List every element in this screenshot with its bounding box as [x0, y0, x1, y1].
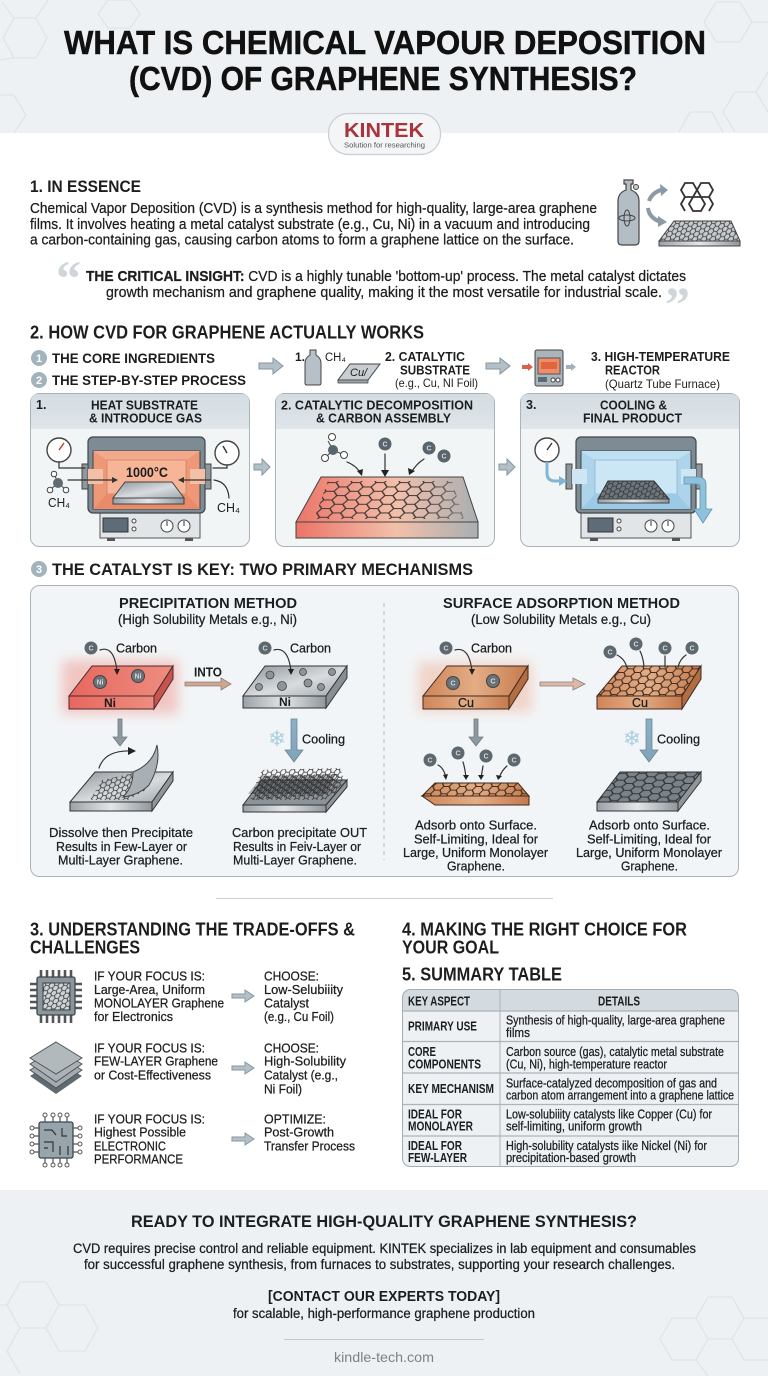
- title: (CVD) OF GRAPHENE SYNTHESIS?: [129, 60, 637, 97]
- badge row: core ingredients: 1: [36, 353, 42, 365]
- section 3 mechanism heading: THE CATALYST IS KEY: TWO PRIMARY MECHANISMS: [52, 561, 473, 579]
- Ni hot block: Ni: [104, 696, 116, 710]
- Cu block with graphene: C: [689, 646, 695, 652]
- Ni hot block: Ni: [96, 680, 104, 686]
- ingredient 2: copper plate: [338, 364, 380, 383]
- Ni block with carbon: Ni: [279, 695, 291, 709]
- Cu block with graphene: C: [633, 642, 639, 648]
- surface adsorption heading: [443, 596, 680, 627]
- section 3 trade-offs heading: CHALLENGES: [30, 938, 140, 958]
- precipitation heading: [118, 596, 297, 627]
- section 4 heading: [402, 920, 687, 958]
- section 2 heading: 2. HOW CVD FOR GRAPHENE ACTUALLY WORKS: [30, 322, 424, 342]
- INTO arrow: INTO: [194, 666, 222, 680]
- row: ideal for few-layer: [408, 1138, 708, 1165]
- call to action: for scalable, high-performance graphene production: [233, 1306, 535, 1321]
- step heading: 3.: [526, 398, 536, 412]
- graphene on gray block: [597, 772, 701, 811]
- header band: [0, 0, 768, 133]
- surface adsorption heading: (Low Solubility Metals e.g., Cu): [471, 612, 651, 627]
- carbon atom: [84, 642, 98, 654]
- atoms falling: C: [382, 442, 388, 448]
- section 1 heading: 1. IN ESSENCE: [30, 177, 141, 196]
- table header: [408, 994, 640, 1008]
- ingredient 1: CH4 cylinder: CH₄: [325, 352, 346, 364]
- adsorb caption left: [403, 818, 549, 874]
- icon: chip: [30, 970, 82, 1023]
- badge row: step-by-step: THE STEP-BY-STEP PROCESS: [52, 372, 246, 388]
- adsorb caption right: [576, 818, 723, 874]
- section 3 trade-offs heading: 3. UNDERSTANDING THE TRADE-OFFS &: [30, 920, 355, 940]
- cooling arrow: Cooling: [302, 732, 345, 746]
- ingredient 2 label: SUBSTRATE: [400, 364, 470, 378]
- row: core components: [408, 1044, 724, 1072]
- adsorb caption left: Self-Limiting, Ideal for: [414, 832, 539, 846]
- website: kindle-tech.com: [334, 1349, 434, 1365]
- section 4 heading: YOUR GOAL: [402, 938, 499, 958]
- peeled graphene block: [70, 745, 173, 811]
- focus text: PERFORMANCE: [94, 1152, 183, 1166]
- call to action: [233, 1289, 535, 1321]
- ingredient 2 label: (e.g., Cu, NI Foil): [395, 376, 478, 390]
- choice text: Ni Foil): [264, 1082, 302, 1096]
- surface adsorption heading: SURFACE ADSORPTION METHOD: [443, 596, 680, 612]
- choice text: CHOOSE:: [264, 968, 319, 984]
- step heading: & CARBON ASSEMBLY: [316, 412, 452, 426]
- arrow down left: [113, 719, 127, 746]
- choice text: CHOOSE:: [264, 1040, 319, 1056]
- furnace cool: [566, 437, 702, 541]
- footer paragraph: for successful graphene synthesis, from furnaces to substrates, supporting your research challenges.: [84, 1257, 675, 1272]
- essence paragraph: [30, 200, 597, 248]
- focus text: [94, 1112, 205, 1166]
- row: ideal for few-layer: High-solubility catalysts iike Nickel (Ni) for: [506, 1138, 708, 1153]
- row: ideal for monolayer: MONOLAYER: [408, 1120, 473, 1134]
- atoms falling: C: [426, 446, 432, 452]
- ingredient 3 label: (Quartz Tube Furnace): [605, 377, 720, 391]
- atoms on thin Cu block: C: [483, 754, 489, 760]
- arrow down: [469, 719, 483, 746]
- essence paragraph: Chemical Vapor Deposition (CVD) is a synthesis method for high-quality, large-area graphene: [30, 200, 597, 217]
- precipitate caption right: [232, 825, 367, 868]
- choice text: OPTIMIZE:: [264, 1112, 326, 1126]
- Ni hot block: Carbon: [116, 642, 157, 656]
- cooling arrow: Cooling: [657, 732, 700, 746]
- Ni hot block: Ni: [134, 674, 142, 680]
- ingredient 2 label: 2. CATALYTIC: [385, 350, 465, 364]
- step heading: [281, 398, 473, 426]
- row: core components: Carbon source (gas), catalytic metal substrate: [506, 1044, 724, 1059]
- footer paragraph: CVD requires precise control and reliable equipment. KINTEK specializes in lab equipment and consumables: [73, 1241, 696, 1256]
- row 1: monolayer: [30, 968, 343, 1024]
- logo: KINTEK: KINTEK: [344, 120, 425, 142]
- choice text: Low-Selubiiity: [264, 982, 343, 997]
- methane molecule and label: [47, 471, 70, 510]
- adsorb caption left: Graphene.: [447, 858, 505, 874]
- cooling arrow: [623, 719, 700, 762]
- precipitate caption left: [49, 825, 193, 868]
- INTO arrow: [185, 666, 231, 690]
- essence paragraph: films. It involves heating a metal catalyst substrate (e.g., Cu, Ni) in a vacuum and introducing: [30, 216, 590, 233]
- precipitate caption right: Results in Feiv-Layer or: [233, 839, 362, 854]
- badge row: step-by-step: 2: [36, 375, 42, 387]
- section 3 mechanism heading: 3: [36, 564, 42, 576]
- title: [64, 24, 706, 97]
- ingredient 3 label: REACTOR: [605, 364, 660, 378]
- precipitate caption left: Multi-Layer Graphene.: [58, 852, 183, 868]
- footer heading: READY TO INTEGRATE HIGH-QUALITY GRAPHENE SYNTHESIS?: [131, 1212, 637, 1231]
- precipitate caption right: Multi-Layer Graphene.: [233, 852, 357, 868]
- choice text: Catalyst: [264, 996, 309, 1010]
- badge row: core ingredients: THE CORE INGREDIENTS: [52, 350, 215, 366]
- ingredient 2 label: [385, 350, 478, 390]
- cooling arrow: [268, 719, 345, 762]
- ingredient 3: furnace mini icon: [522, 350, 576, 386]
- table header: DETAILS: [598, 994, 640, 1008]
- atoms on thin Cu block: C: [427, 758, 433, 764]
- Cu hot block: C: [443, 646, 449, 652]
- panel: step 1 heat substrate: [30, 394, 250, 546]
- cooling arrow: ❄: [623, 727, 641, 752]
- choice text: (e.g., Cu Foil): [264, 1009, 334, 1024]
- row: core components: CORE: [408, 1045, 436, 1059]
- furnace hot: [68, 437, 211, 541]
- essence paragraph: a carbon-containing gas, causing carbon atoms to form a graphene lattice on the surface.: [30, 232, 574, 248]
- multi-layer graphene block: [243, 768, 347, 812]
- insight text: THE CRITICAL INSIGHT: CVD is a highly tunable 'bottom-up' process. The metal catalyst dictates: [86, 268, 686, 285]
- row: key mechanism: [408, 1076, 734, 1102]
- quote mark: close: ”: [665, 276, 690, 332]
- focus text: Highest Possible: [94, 1124, 186, 1140]
- Ni block with carbon: C: [262, 646, 268, 652]
- Ni block with carbon: [243, 642, 347, 709]
- choice text: High-Solubility: [264, 1054, 346, 1068]
- Cu hot block: C: [490, 678, 496, 686]
- precipitate caption left: Dissolve then Precipitate: [49, 825, 193, 840]
- ingredient 3 label: 3. HIGH-TEMPERATURE: [591, 350, 730, 364]
- step heading: FINAL PRODUCT: [583, 412, 682, 426]
- arrow: [232, 990, 254, 1002]
- choice text: [264, 1040, 346, 1096]
- focus text: for Electronics: [94, 1009, 173, 1024]
- step heading: 2. CATALYTIC DECOMPOSITION: [281, 398, 473, 412]
- arrow between step 2 and 3: [499, 459, 515, 475]
- footer paragraph: [73, 1241, 696, 1272]
- ingredient 2: copper plate: Cu/: [350, 367, 368, 379]
- atoms on thin Cu block: C: [511, 758, 517, 764]
- step heading: [526, 398, 682, 426]
- icon: circuit board: [30, 1113, 82, 1167]
- Cu block with graphene: [597, 638, 701, 710]
- panel: two mechanisms: [30, 586, 738, 876]
- gauge left: [47, 438, 85, 468]
- choice text: Post-Growth: [264, 1124, 334, 1140]
- arrow: [232, 1062, 254, 1074]
- focus text: [94, 968, 224, 1024]
- choice text: Catalyst (e.g.,: [264, 1068, 338, 1082]
- Ni hot block: [62, 642, 178, 714]
- choice text: Transfer Process: [264, 1138, 355, 1154]
- methane label right: CH₄: [217, 500, 240, 515]
- icon: layer stack: [30, 1042, 82, 1094]
- atoms on thin Cu block: [422, 746, 529, 805]
- logo: KINTEK: [328, 114, 440, 154]
- section 5 heading: 5. SUMMARY TABLE: [402, 964, 562, 984]
- focus text: Large-Area, Uniform: [94, 982, 205, 997]
- atoms falling: [322, 434, 450, 477]
- summary table: [402, 989, 739, 1167]
- Ni hot block: C: [88, 646, 94, 652]
- graphene plate: [296, 477, 478, 538]
- row: ideal for monolayer: [408, 1106, 713, 1134]
- atoms on thin Cu block: C: [455, 750, 461, 758]
- row: primary use: [408, 1012, 725, 1040]
- precipitation heading: (High Solubility Metals e.g., Ni): [118, 612, 297, 627]
- focus text: IF YOUR FOCUS IS:: [94, 1040, 205, 1056]
- choice text: [264, 1112, 355, 1154]
- row: ideal for few-layer: precipitation-based growth: [506, 1150, 636, 1165]
- ingredient 3 label: [591, 350, 730, 391]
- step heading: COOLING &: [600, 398, 667, 412]
- atoms falling: C: [441, 454, 447, 460]
- adsorb caption left: Adsorb onto Surface.: [415, 818, 537, 832]
- title: WHAT IS CHEMICAL VAPOUR DEPOSITION: [64, 24, 706, 61]
- gauge: [535, 438, 567, 486]
- adsorb caption right: Graphene.: [621, 858, 678, 874]
- row: core components: COMPONENTS: [408, 1058, 481, 1072]
- focus text: MONOLAYER Graphene: [94, 996, 224, 1010]
- critical insight callout: [56, 250, 690, 332]
- quote mark: open: “: [56, 250, 81, 306]
- Cu hot block: Carbon: [471, 642, 512, 656]
- row: core components: (Cu, Ni), high-temperature reactor: [506, 1056, 668, 1072]
- focus text: [94, 1040, 218, 1082]
- icon: gas bottle to graphene on substrate: [618, 180, 740, 246]
- ingredient 1: CH4 cylinder: 1.: [295, 350, 305, 364]
- focus text: or Cost-Effectiveness: [94, 1068, 211, 1082]
- ingredient 1: CH4 cylinder: [295, 350, 346, 385]
- focus text: FEW-LAYER Graphene: [94, 1054, 218, 1068]
- adsorb caption left: Large, Uniform Monolayer: [403, 845, 549, 860]
- table header: KEY ASPECT: [408, 994, 470, 1008]
- row: primary use: Synthesis of high-quality, large-area graphene: [506, 1012, 725, 1028]
- outflow arrow: [684, 477, 712, 523]
- adsorb caption right: Self-Limiting, Ideal for: [587, 832, 712, 846]
- row: primary use: PRIMARY USE: [408, 1020, 477, 1034]
- precipitate caption right: Carbon precipitate OUT: [232, 825, 367, 840]
- precipitation heading: PRECIPITATION METHOD: [119, 596, 297, 612]
- step heading: HEAT SUBSTRATE: [91, 398, 198, 412]
- row: key mechanism: KEY MECHANISM: [408, 1082, 494, 1096]
- row: ideal for few-layer: FEW-LAYER: [408, 1151, 467, 1165]
- call to action: [CONTACT OUR EXPERTS TODAY]: [268, 1289, 500, 1305]
- insight text: [86, 268, 686, 301]
- insight text: growth mechanism and graphene quality, making it the most versatile for industrial scale.: [106, 284, 662, 301]
- Cu block with graphene: Cu: [632, 696, 648, 710]
- arrow: [232, 1133, 254, 1145]
- arrow across: [540, 678, 585, 690]
- adsorb caption right: Large, Uniform Monolayer: [576, 845, 723, 860]
- arrow: [259, 358, 283, 374]
- section 4 heading: 4. MAKING THE RIGHT CHOICE FOR: [402, 920, 687, 940]
- step heading: [36, 398, 202, 426]
- precipitate caption left: Results in Few-Layer or: [56, 839, 188, 854]
- footer band: [0, 1190, 768, 1376]
- row 3: electronic performance: [30, 1112, 355, 1167]
- row: key mechanism: Surface-catalyzed decomposition of gas and: [506, 1076, 717, 1090]
- gauge right: [213, 441, 239, 498]
- row: ideal for monolayer: self-limiting, uniform growth: [506, 1118, 642, 1134]
- row: ideal for monolayer: IDEAL FOR: [408, 1108, 462, 1122]
- step heading: & INTRODUCE GAS: [89, 412, 202, 426]
- row: ideal for monolayer: Low-solubiiity catalysts like Copper (Cu) for: [506, 1106, 713, 1122]
- logo: KINTEK: Solution for researching: [344, 142, 425, 150]
- choice text: [264, 968, 343, 1024]
- focus text: IF YOUR FOCUS IS:: [94, 968, 205, 984]
- methane molecule and label: CH₄: [48, 495, 70, 510]
- Cu hot block: [418, 642, 532, 712]
- arrow: [486, 358, 510, 374]
- panel: step 2 catalytic decomposition: [276, 394, 494, 546]
- focus text: ELECTRONIC: [94, 1138, 166, 1154]
- panel: step 3 cooling: [520, 394, 740, 546]
- section 3 trade-offs heading: [30, 920, 355, 958]
- row: ideal for few-layer: IDEAL FOR: [408, 1139, 462, 1153]
- arrow between step 1 and 2: [254, 459, 270, 475]
- Cu hot block: C: [450, 680, 456, 688]
- adsorb caption right: Adsorb onto Surface.: [589, 818, 710, 832]
- furnace hot: 1000°C: [126, 465, 168, 480]
- Ni block with carbon: Carbon: [290, 642, 331, 656]
- cooling arrow: ❄: [268, 727, 286, 752]
- row: primary use: films: [506, 1025, 530, 1040]
- Cu block with graphene: C: [607, 650, 613, 656]
- Cu hot block: Cu: [458, 696, 474, 710]
- row 2: few-layer: [30, 1040, 346, 1096]
- Cu block with graphene: C: [662, 646, 668, 652]
- step heading: 1.: [36, 398, 46, 412]
- focus text: IF YOUR FOCUS IS:: [94, 1112, 205, 1126]
